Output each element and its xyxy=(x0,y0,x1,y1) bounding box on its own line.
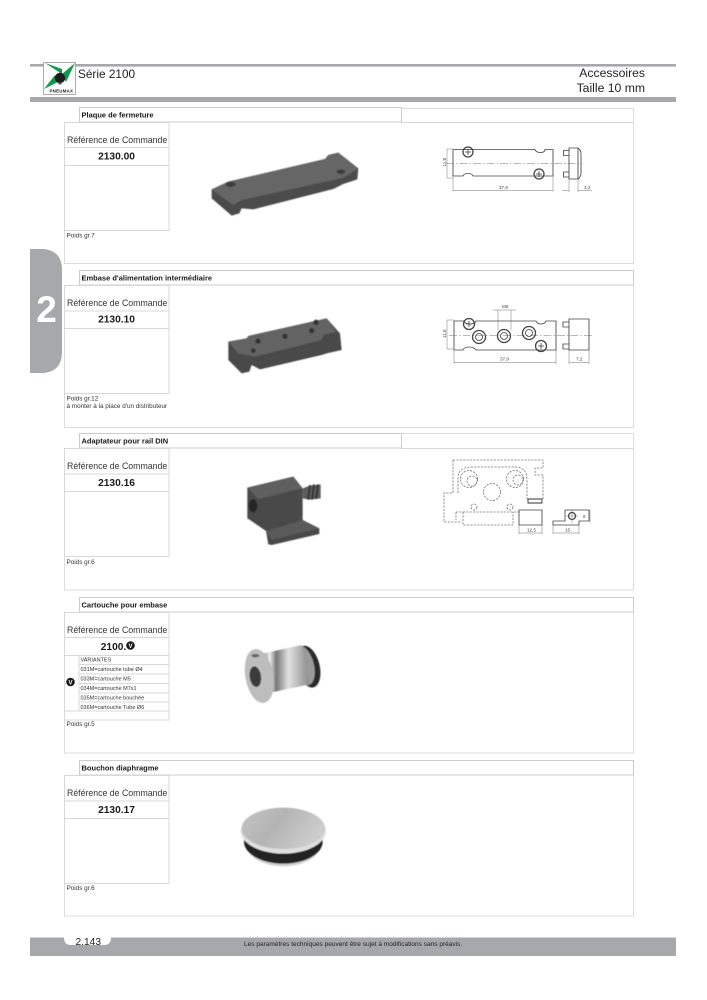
chapter tab: 2 xyxy=(36,289,57,330)
header top rule xyxy=(30,64,676,67)
reference table with variants: 033M=cartouche M5 xyxy=(80,676,131,682)
reference table xyxy=(64,286,169,394)
technical drawing xyxy=(444,460,590,534)
weight note: Poids gr.6 xyxy=(66,559,95,566)
reference table with variants: Référence de Commande xyxy=(67,625,167,635)
technical drawing: 37,8 xyxy=(499,185,508,190)
photo: diaphragm plug xyxy=(241,808,326,866)
reference table: 2130.00 xyxy=(98,152,135,162)
chapter tab xyxy=(30,249,62,373)
reference table with variants: 031M=cartouche tube Ø4 xyxy=(80,667,143,673)
title bar: Embase d'alimentation intermédiaire xyxy=(82,274,212,282)
header right text: Accessoires xyxy=(579,66,645,80)
technical drawing: 3,2 xyxy=(584,185,591,190)
reference table with variants: 035M=cartouche bouchée xyxy=(80,696,144,702)
reference table with variants: V xyxy=(128,644,133,650)
weight note: Poids gr.12 xyxy=(66,396,99,402)
reference table: Référence de Commande xyxy=(67,461,167,471)
reference table with variants: 034M=cartouche M7x1 xyxy=(80,686,137,692)
title bar xyxy=(80,598,634,612)
weight note: Poids gr.6 xyxy=(66,885,95,892)
technical drawing xyxy=(442,304,592,364)
title bar xyxy=(80,108,633,122)
page number tab xyxy=(64,937,111,948)
technical drawing: 11,8 xyxy=(442,329,447,338)
reference table xyxy=(64,122,169,230)
weight note xyxy=(66,396,167,410)
panel: Bouchon diaphragme xyxy=(64,760,634,916)
weight note: Poids gr.5 xyxy=(66,721,95,728)
footer band xyxy=(30,938,676,956)
reference table xyxy=(64,448,169,556)
reference table: 2130.16 xyxy=(98,478,135,489)
reference table xyxy=(64,776,169,884)
reference table: 2130.10 xyxy=(98,314,135,326)
reference table with variants: V xyxy=(68,680,73,686)
logo: Pneumax: PNEUMAX xyxy=(50,89,73,94)
reference table: Référence de Commande xyxy=(67,135,167,145)
technical drawing xyxy=(442,147,592,192)
title bar xyxy=(80,270,634,285)
technical drawing: 11,8 xyxy=(442,157,447,166)
title bar: Bouchon diaphragme xyxy=(82,764,159,772)
header right text: Taille 10 mm xyxy=(577,81,645,95)
technical drawing: 6 xyxy=(583,514,586,519)
logo: Pneumax xyxy=(44,62,76,94)
title bar xyxy=(80,760,634,775)
photo: closing plate xyxy=(212,153,358,216)
title bar: Adaptateur pour rail DIN xyxy=(82,436,168,446)
panel: Cartouche pour embase xyxy=(64,598,634,753)
panel: Adaptateur pour rail DIN xyxy=(64,434,634,590)
technical drawing: M5 xyxy=(502,304,509,309)
title bar: Cartouche pour embase xyxy=(82,600,167,610)
photo: cartridge xyxy=(241,643,324,705)
technical drawing: 15 xyxy=(565,528,571,532)
header bottom band xyxy=(30,97,676,102)
reference table: Référence de Commande xyxy=(67,788,167,798)
reference table with variants: 2100. xyxy=(101,642,126,653)
header right text xyxy=(577,66,645,95)
reference table: 2130.17 xyxy=(98,805,135,816)
title bar: Plaque de fermeture xyxy=(82,110,154,120)
header title: Série 2100 xyxy=(78,67,135,81)
technical drawing: 7,2 xyxy=(576,356,583,362)
page number tab: 2.143 xyxy=(76,937,101,948)
panel: Plaque de fermeture xyxy=(64,108,634,264)
photo: intermediate supply base xyxy=(228,318,342,373)
footer note: Les paramètres techniques peuvent être sujet à modifications sans préavis. xyxy=(244,941,462,948)
reference table with variants: 036M=cartouche Tube Ø6 xyxy=(80,705,144,711)
panel: Embase d'alimentation intermédiaire xyxy=(64,270,634,428)
technical drawing: 37,9 xyxy=(500,356,509,362)
weight note: Poids gr.7 xyxy=(66,232,95,240)
weight note: à monter à la place d'un distributeur xyxy=(66,403,167,410)
reference table: Référence de Commande xyxy=(67,298,167,308)
technical drawing: 12,5 xyxy=(527,528,536,532)
reference table with variants xyxy=(64,612,169,720)
reference table with variants: VARIANTES xyxy=(80,658,112,664)
photo: DIN rail adapter xyxy=(247,477,321,545)
title bar xyxy=(80,434,633,448)
